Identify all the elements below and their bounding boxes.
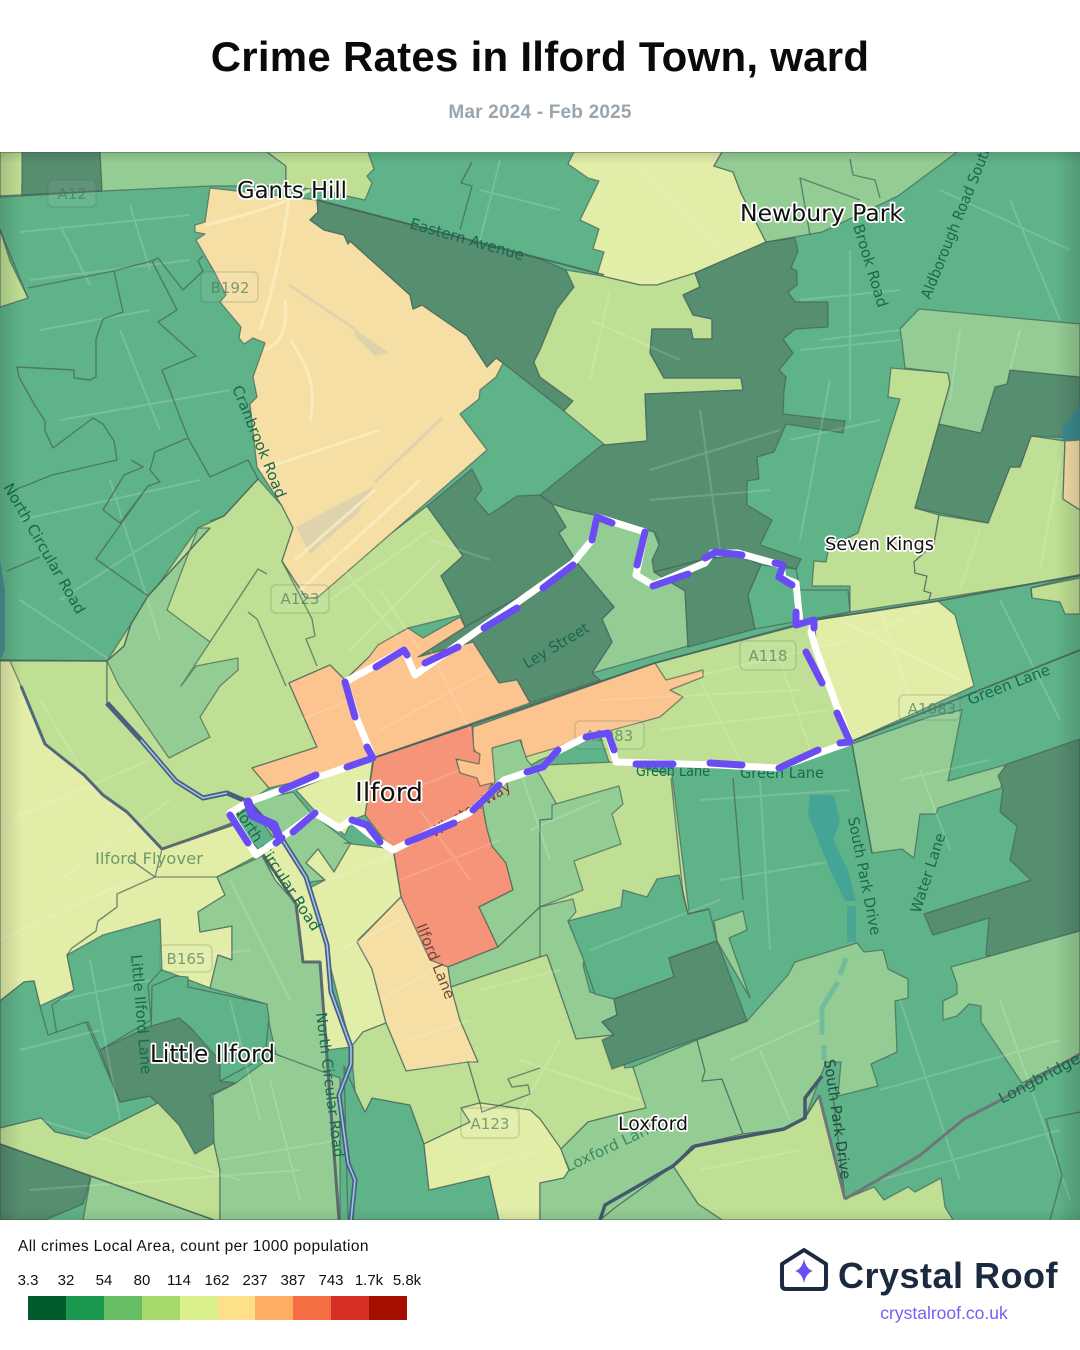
road name labels: Green Lane [965,661,1053,709]
road name labels: Ilford Lane [412,921,459,1002]
rivers and major roads [21,686,1080,1220]
main road lines [317,200,1080,758]
road name labels: North Circular Road [0,480,89,617]
road number shields: A1083 [585,727,633,745]
road name labels: Brook Road [849,222,892,309]
place name labels: Ilford Flyover [95,849,203,868]
place name labels: Newbury Park [740,201,904,227]
road name labels: South Park Drive [820,1058,855,1180]
website url: crystalroof.co.uk [880,1303,1008,1323]
road name labels: Ley Street [520,619,593,672]
map regions: north-west [0,152,574,1006]
title: Crime Rates in Ilford Town, ward [211,33,869,80]
text: 114 [167,1272,191,1289]
road name labels: Loxford Lane [562,1117,660,1176]
road number shields: B192 [211,279,249,297]
logo wordmark: Crystal Roof [838,1255,1058,1296]
text: 32 [58,1272,74,1289]
road number shields: A1083 [908,700,956,718]
road name labels: North Circular Road [229,800,324,934]
place name labels: Ilford [355,778,423,808]
text: 162 [204,1272,230,1289]
road name labels: Longbridge [995,1049,1080,1108]
text: 3.3 [18,1272,38,1289]
road name labels: Little Ilford Lane [127,954,155,1075]
legend colour bar [28,1296,407,1320]
road number shields [48,180,960,1138]
road number shields: B165 [167,950,205,968]
road name labels: Green Lane [636,762,710,780]
text: 1.7k [355,1272,383,1289]
road name labels: Green Lane [740,764,824,782]
place name labels: Seven Kings [825,534,934,555]
legend title: All crimes Local Area, count per 1000 population [18,1238,369,1255]
road number shields: A123 [471,1115,509,1133]
pond and streams [0,405,1080,1060]
road name labels: Winston Way [427,777,514,841]
road number shields: A123 [281,590,319,608]
road name labels: Water Lane [907,831,949,915]
park details in the tan region [205,190,442,590]
road name labels: Cranbrook Road [228,383,290,501]
place name labels: Little Ilford [150,1040,275,1068]
text: 743 [318,1272,344,1289]
text: 54 [96,1272,112,1289]
text: 80 [134,1272,150,1289]
map regions: north-east [427,152,1080,627]
road name labels [0,142,1080,1180]
map regions: south-west [0,822,499,1220]
road name labels: North Circular Road [312,1011,348,1158]
legend scale labels [18,1272,422,1289]
choropleth map [0,152,1080,1220]
road number shields: A12 [57,185,87,203]
road name labels: South Park Drive [844,815,885,937]
place name labels: Loxford [618,1113,688,1135]
place name labels: Gants Hill [237,178,347,204]
map regions: ward interior [248,504,974,1047]
text: 237 [242,1272,268,1289]
street grid [0,160,1070,1200]
place name labels [95,178,934,1135]
road number shields: A118 [749,647,787,665]
logo icon: house with sparkle [780,1248,828,1291]
text: 387 [280,1272,306,1289]
road name labels: Eastern Avenue [408,215,526,264]
map regions: south-centre and south-east [424,710,1080,1220]
text: 5.8k [393,1272,421,1289]
subtitle: date range: Mar 2024 - Feb 2025 [448,102,632,123]
boundary lines between neighbourhoods [0,159,1080,1220]
map edge shading [0,152,1080,1220]
ward boundary: Ilford Town [230,517,850,855]
